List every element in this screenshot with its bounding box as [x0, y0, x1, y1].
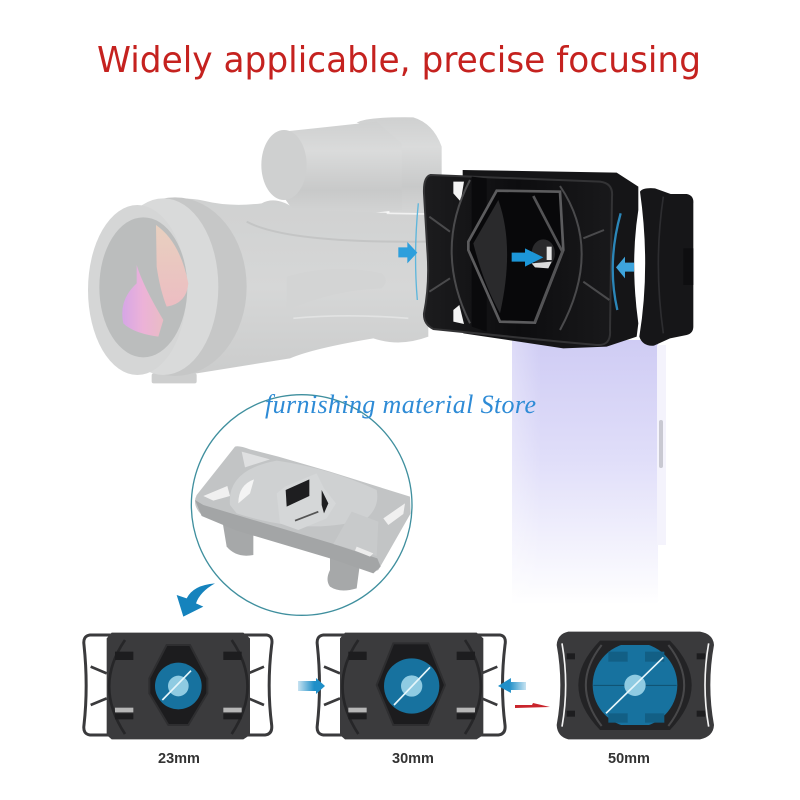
- watermark: furnishing material Store: [265, 390, 536, 419]
- title: Widely applicable, precise focusing: [97, 40, 701, 81]
- main body: [153, 199, 428, 377]
- side clamp: [639, 188, 693, 346]
- hexagon aperture: [468, 191, 563, 323]
- label 23mm: 23mm: [158, 751, 200, 767]
- optic hub: [532, 239, 555, 267]
- curved blue arrow: [177, 583, 215, 617]
- label 30mm: 30mm: [392, 751, 434, 767]
- label 50mm: 50mm: [608, 751, 650, 767]
- hexagon aperture: [377, 643, 445, 725]
- diamond aperture: [149, 645, 207, 725]
- grey mount body: [195, 446, 411, 571]
- mount stage: 50mm: [557, 632, 714, 739]
- dark body: [340, 633, 483, 739]
- blue motion arrow left: [416, 203, 418, 300]
- circle outline: [191, 395, 412, 615]
- front plate: [424, 175, 612, 345]
- arc and strut ribs: [429, 180, 609, 330]
- lens reflections: [156, 225, 188, 307]
- mount stage: 23mm: [84, 633, 272, 739]
- blue curve on clamp side: [613, 213, 621, 310]
- centre hub and diameter line: [168, 676, 189, 696]
- eyepiece: [357, 117, 442, 217]
- detail circle with grey mount: [177, 395, 412, 617]
- window gaps: [453, 182, 464, 202]
- mount stage: 30mm: [317, 633, 505, 739]
- blue arrow centre: [512, 248, 543, 267]
- blue disc: [593, 643, 677, 727]
- blue disc: [384, 658, 439, 714]
- mount openings: [242, 452, 270, 467]
- arrow: red step: [515, 703, 550, 708]
- arrow: blue push left: [498, 678, 526, 693]
- phone behind the mount: [512, 340, 666, 605]
- mount feet: [220, 507, 253, 556]
- blue disc: [155, 663, 202, 709]
- dark window: [286, 479, 309, 507]
- dark arc frame: [578, 641, 692, 730]
- back frame: [463, 170, 638, 348]
- arrow: blue push right: [298, 678, 325, 694]
- dark body: [107, 633, 250, 739]
- phone clamp mount assembly: [424, 170, 693, 348]
- frame wings: [317, 635, 505, 735]
- front lip: [195, 500, 381, 573]
- centre hub and diameter line: [401, 675, 422, 697]
- hexagonal optic holder: [277, 473, 336, 530]
- blue arrow right: [616, 257, 634, 278]
- mount ring: [230, 461, 377, 526]
- lens rings: [103, 197, 247, 376]
- outer body: [557, 632, 714, 739]
- white edge slivers: [562, 643, 566, 727]
- monocular telescope: [88, 117, 442, 383]
- frame wings: [84, 635, 272, 735]
- slots: [567, 653, 575, 659]
- upper tube: [283, 122, 402, 220]
- centre hub and diameter line: [624, 675, 646, 696]
- tube foot: [152, 373, 197, 383]
